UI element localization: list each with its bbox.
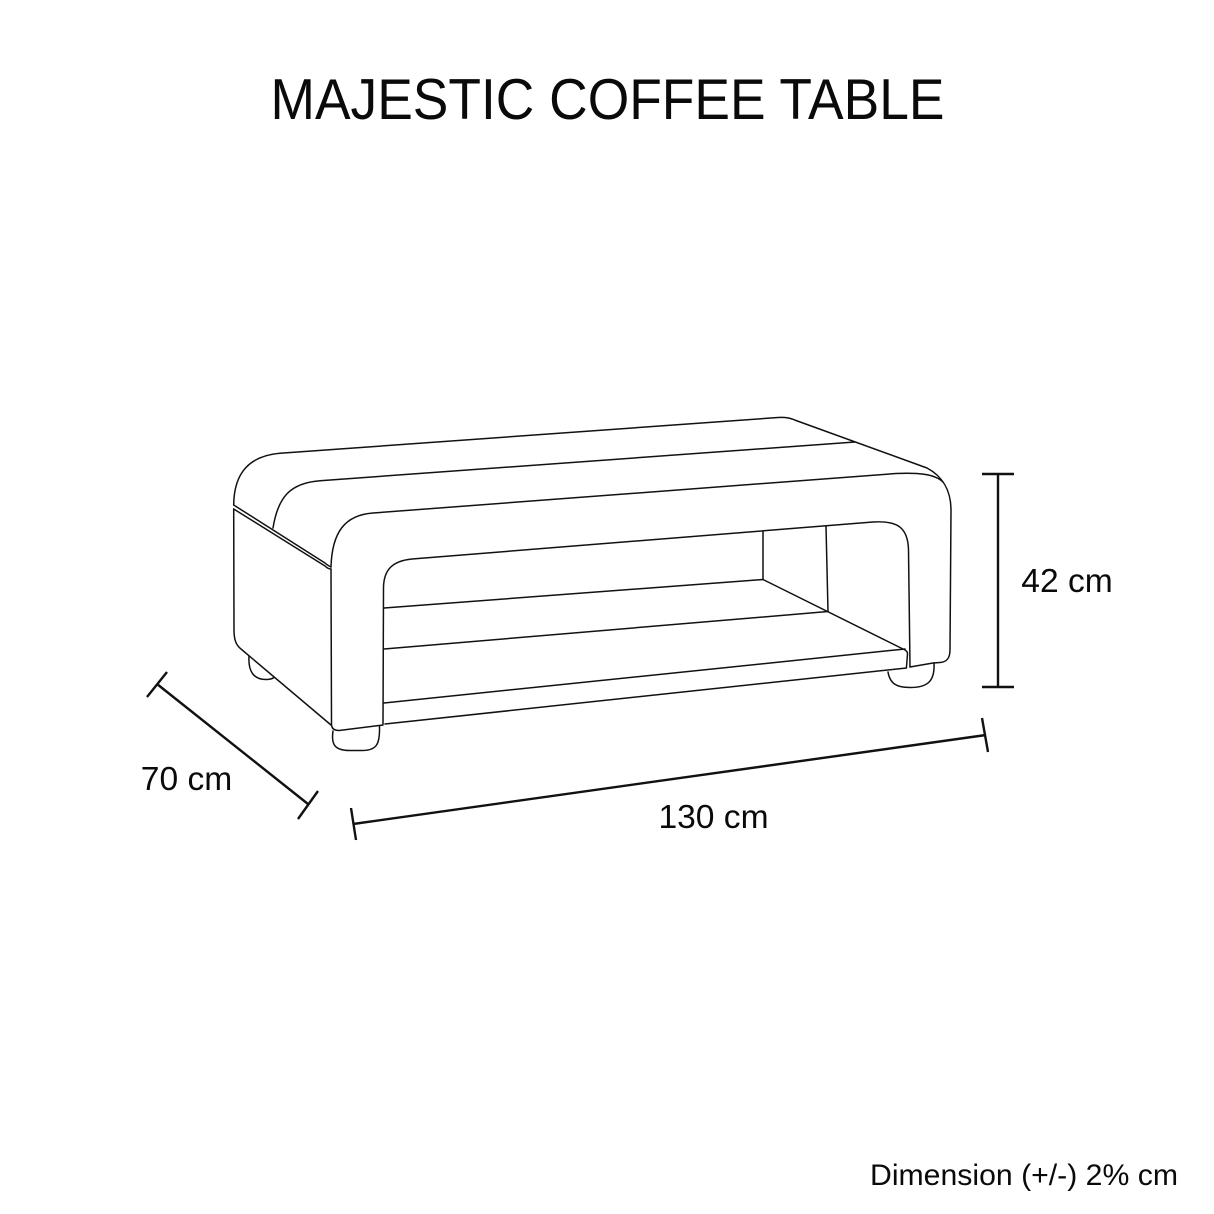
coffee table line drawing xyxy=(234,417,951,750)
top band seam xyxy=(273,442,855,528)
back panel xyxy=(763,526,828,612)
dimension: height 42 cm xyxy=(982,474,1014,687)
label: 130 cm: 130 cm xyxy=(658,799,769,836)
front frame top edge xyxy=(331,473,943,567)
side piping xyxy=(234,505,331,567)
label: 70 cm: 70 cm xyxy=(141,761,232,798)
table top and back outline xyxy=(234,417,951,667)
footnote: Dimension (+/-) 2% cm xyxy=(870,1159,1178,1192)
title: MAJESTIC COFFEE TABLE xyxy=(270,68,944,132)
upper shelf back edge xyxy=(384,580,908,667)
shelf middle seam xyxy=(384,612,828,649)
dimension: depth 70 cm xyxy=(147,672,318,819)
dimension: width 130 cm xyxy=(351,718,988,840)
front left edge xyxy=(331,569,383,730)
label: 42 cm: 42 cm xyxy=(1021,563,1113,600)
left side panel xyxy=(234,509,331,725)
back left foot xyxy=(249,656,274,680)
inner opening xyxy=(383,522,910,724)
front left foot xyxy=(333,726,380,750)
shelf front edges xyxy=(384,649,905,703)
front right foot xyxy=(888,663,934,688)
